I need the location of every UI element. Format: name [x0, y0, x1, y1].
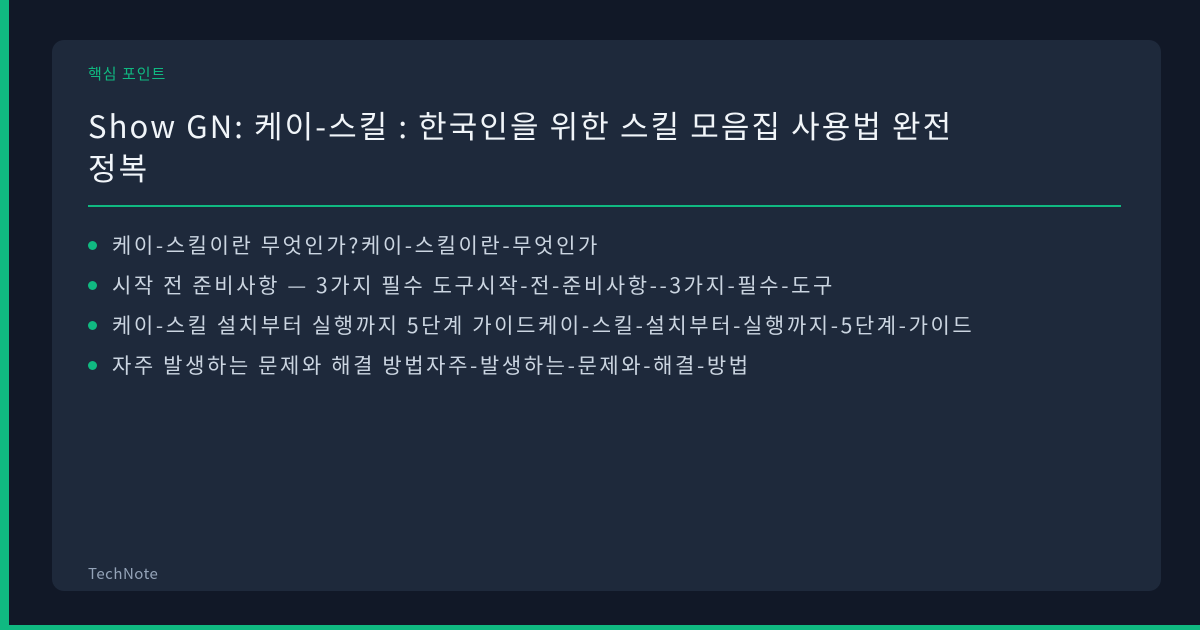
- title: Show GN: 케이-스킬 : 한국인을 위한 스킬 모음집 사용법 완전 정복: [88, 102, 953, 189]
- bullet 2: 시작 전 준비사항 — 3가지 필수 도구시작-전-준비사항--3가지-필수-도구: [112, 270, 835, 300]
- bullet list: [88, 230, 974, 380]
- footer brand: TechNote: [88, 563, 158, 584]
- kicker label: 핵심 포인트: [88, 63, 166, 84]
- bullet 4: 자주 발생하는 문제와 해결 방법자주-발생하는-문제와-해결-방법: [112, 350, 751, 380]
- bullet 1: 케이-스킬이란 무엇인가?케이-스킬이란-무엇인가: [112, 230, 600, 260]
- bullet 3: 케이-스킬 설치부터 실행까지 5단계 가이드케이-스킬-설치부터-실행까지-5단계-가이드: [112, 310, 974, 340]
